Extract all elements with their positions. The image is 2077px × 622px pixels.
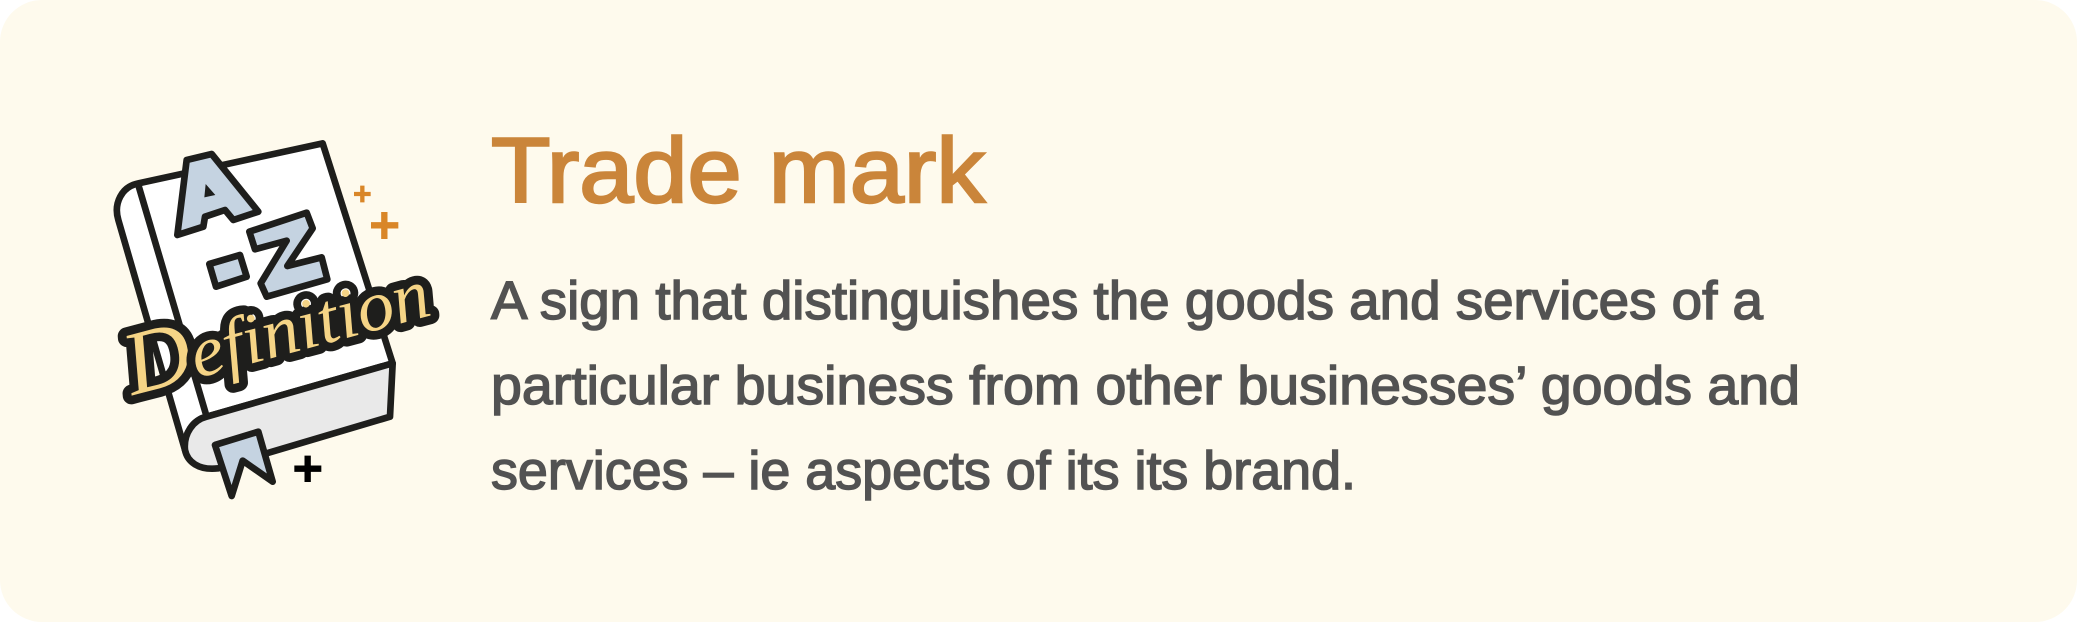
letter Z — [249, 213, 327, 297]
black plus — [294, 456, 321, 482]
dash — [209, 255, 247, 287]
body text — [491, 271, 1800, 501]
bookmark — [215, 432, 273, 496]
letter A — [177, 154, 258, 235]
letter A counter — [204, 184, 215, 197]
definition script label: Definition — [110, 238, 439, 415]
line 2: particular business from other businesses’ goods and — [491, 356, 1800, 416]
line 3: services – ie aspects of its its brand. — [491, 441, 1356, 501]
icon: definition book — [110, 143, 439, 496]
spine line — [138, 185, 207, 417]
line 1: A sign that distinguishes the goods and services of a — [491, 271, 1764, 331]
small orange plus — [354, 186, 371, 202]
book cover and pages — [117, 143, 393, 450]
book page edge — [185, 363, 393, 469]
large orange plus — [371, 212, 398, 239]
title: Trade mark — [491, 120, 986, 222]
